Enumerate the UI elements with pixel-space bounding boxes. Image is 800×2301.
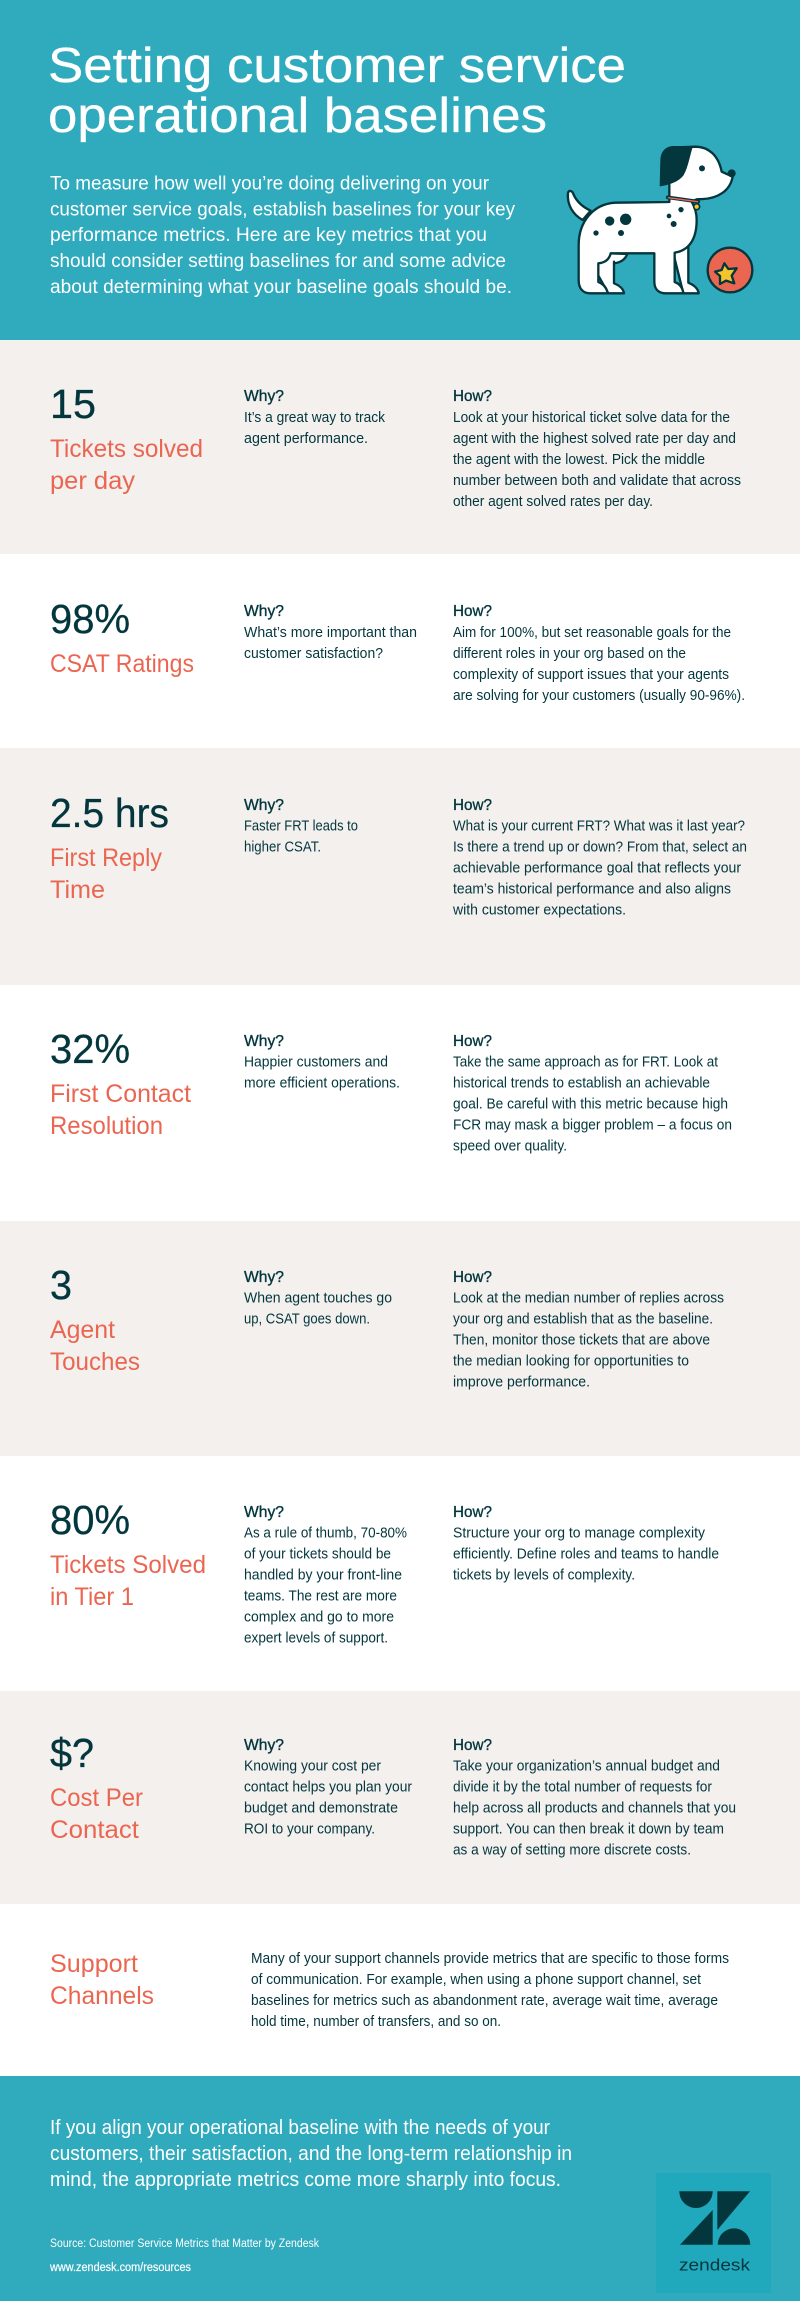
how column: What is your current FRT? What was it last year? bbox=[453, 818, 745, 834]
why column: Why? bbox=[244, 1504, 284, 1521]
metric label bbox=[50, 1080, 191, 1140]
intro text: performance metrics. Here are key metrics that you bbox=[50, 224, 487, 246]
how column: support. You can then break it down by team bbox=[453, 1822, 724, 1838]
why column: Why? bbox=[244, 603, 284, 620]
why column: Why? bbox=[244, 1737, 284, 1754]
closing statement: customers, their satisfaction, and the long-term relationship in bbox=[50, 2143, 572, 2165]
why column: Happier customers and bbox=[244, 1054, 388, 1070]
how column: How? bbox=[453, 1033, 492, 1050]
icon: dalmatian dog with ball bbox=[568, 146, 752, 293]
why column: customer satisfaction? bbox=[244, 646, 383, 662]
how column bbox=[452, 797, 747, 918]
why column bbox=[244, 1269, 392, 1328]
why column: handled by your front-line bbox=[244, 1568, 402, 1584]
why column bbox=[244, 388, 386, 447]
intro text: should consider setting baselines for and some advice bbox=[50, 250, 506, 272]
how column: different roles in your org based on the bbox=[453, 646, 686, 662]
how column: with customer expectations. bbox=[452, 902, 626, 918]
why column: Why? bbox=[244, 797, 284, 814]
panel: first reply time bbox=[0, 748, 800, 985]
how column bbox=[453, 1504, 719, 1584]
how column bbox=[453, 1737, 736, 1858]
header panel bbox=[0, 0, 800, 340]
why column: expert levels of support. bbox=[244, 1630, 388, 1646]
how column: How? bbox=[453, 1269, 492, 1286]
why column: budget and demonstrate bbox=[244, 1800, 398, 1816]
panel: first contact resolution bbox=[0, 985, 800, 1221]
footer panel bbox=[0, 2076, 800, 2301]
how column: efficiently. Define roles and teams to handle bbox=[453, 1546, 719, 1562]
how column: help across all products and channels that you bbox=[453, 1800, 736, 1816]
how column bbox=[453, 1269, 724, 1390]
metric label bbox=[50, 1551, 206, 1611]
website url: www.zendesk.com/resources bbox=[49, 2262, 191, 2274]
why column bbox=[244, 1737, 412, 1838]
why column: higher CSAT. bbox=[244, 840, 321, 856]
why column: Why? bbox=[244, 1269, 284, 1286]
why column bbox=[244, 1033, 400, 1092]
how column: team’s historical performance and also aligns bbox=[453, 882, 731, 898]
how column: How? bbox=[453, 797, 492, 814]
metric label bbox=[50, 844, 162, 904]
panel: cost per contact bbox=[0, 1691, 800, 1904]
why column bbox=[244, 603, 417, 662]
zendesk logo bbox=[656, 2173, 771, 2293]
metric value: 15 bbox=[50, 381, 96, 427]
how column: tickets by levels of complexity. bbox=[453, 1568, 635, 1584]
title: operational baselines bbox=[48, 89, 547, 143]
how column: Structure your org to manage complexity bbox=[453, 1526, 706, 1542]
why column: agent performance. bbox=[244, 431, 368, 447]
metric value: 32% bbox=[50, 1026, 130, 1072]
why column: Why? bbox=[244, 388, 284, 405]
how column: speed over quality. bbox=[453, 1138, 567, 1154]
metric value: 2.5 hrs bbox=[50, 790, 169, 836]
how column: Look at your historical ticket solve data for the bbox=[453, 410, 730, 426]
description: Many of your support channels provide metrics that are specific to those forms bbox=[251, 1951, 729, 1967]
how column: the agent with the lowest. Pick the middle bbox=[453, 452, 705, 468]
how column bbox=[453, 603, 745, 704]
closing statement bbox=[50, 2117, 572, 2191]
metric value: 80% bbox=[50, 1497, 130, 1543]
how column: FCR may mask a bigger problem – a focus on bbox=[453, 1118, 732, 1134]
how column: achievable performance goal that reflects your bbox=[453, 860, 741, 876]
how column: divide it by the total number of requests for bbox=[453, 1780, 712, 1796]
intro text: about determining what your baseline goals should be. bbox=[50, 276, 512, 298]
metric label: First Contact bbox=[50, 1080, 191, 1108]
how column: Then, monitor those tickets that are above bbox=[453, 1332, 710, 1348]
title bbox=[48, 39, 626, 143]
section label bbox=[50, 1950, 154, 2010]
how column: complexity of support issues that your agents bbox=[453, 667, 729, 683]
how column: historical trends to establish an achievable bbox=[453, 1076, 710, 1092]
source line: Source: Customer Service Metrics that Matter by Zendesk bbox=[50, 2238, 319, 2250]
metric label bbox=[50, 1784, 143, 1844]
metric label bbox=[50, 1316, 140, 1376]
metric label bbox=[50, 435, 203, 495]
metric label: Touches bbox=[50, 1348, 140, 1376]
metric label: Resolution bbox=[50, 1112, 163, 1140]
how column: goal. Be careful with this metric because high bbox=[453, 1096, 728, 1112]
why column: It’s a great way to track bbox=[244, 410, 386, 426]
metric label: CSAT Ratings bbox=[50, 650, 194, 678]
how column: Take your organization’s annual budget and bbox=[453, 1758, 720, 1774]
how column: agent with the highest solved rate per day and bbox=[453, 431, 736, 447]
metric value: $? bbox=[50, 1730, 94, 1776]
metric label: Tickets Solved bbox=[50, 1551, 206, 1579]
panel: CSAT ratings bbox=[0, 554, 800, 748]
intro text: customer service goals, establish baselines for your key bbox=[50, 198, 515, 220]
how column: Look at the median number of replies across bbox=[453, 1290, 724, 1306]
panel: tickets solved in tier 1 bbox=[0, 1456, 800, 1691]
why column: Knowing your cost per bbox=[244, 1758, 381, 1774]
panel: agent touches bbox=[0, 1221, 800, 1456]
how column bbox=[453, 388, 741, 510]
metric label: Contact bbox=[50, 1816, 139, 1844]
zendesk logo: zendesk bbox=[679, 2256, 751, 2274]
intro text: To measure how well you’re doing delivering on your bbox=[50, 172, 489, 194]
why column: As a rule of thumb, 70-80% bbox=[244, 1526, 407, 1542]
how column: number between both and validate that across bbox=[453, 473, 741, 489]
why column: When agent touches go bbox=[244, 1290, 392, 1306]
how column: Is there a trend up or down? From that, select an bbox=[453, 840, 747, 856]
why column: ROI to your company. bbox=[244, 1822, 375, 1838]
why column: Faster FRT leads to bbox=[244, 818, 358, 834]
description: of communication. For example, when using a phone support channel, set bbox=[251, 1972, 701, 1988]
how column: are solving for your customers (usually 90-96%). bbox=[453, 688, 745, 704]
how column: other agent solved rates per day. bbox=[453, 494, 653, 510]
why column: contact helps you plan your bbox=[244, 1780, 412, 1796]
section label: Support bbox=[50, 1950, 138, 1978]
metric label: in Tier 1 bbox=[50, 1583, 134, 1611]
how column: How? bbox=[453, 1504, 492, 1521]
how column: How? bbox=[453, 388, 492, 405]
why column: complex and go to more bbox=[244, 1610, 394, 1626]
metric label: Time bbox=[50, 876, 105, 904]
metric label: Tickets solved bbox=[50, 435, 203, 463]
how column: How? bbox=[453, 603, 492, 620]
metric label: Agent bbox=[50, 1316, 115, 1344]
how column: the median looking for opportunities to bbox=[453, 1354, 689, 1370]
closing statement: mind, the appropriate metrics come more sharply into focus. bbox=[50, 2169, 561, 2191]
metric label: First Reply bbox=[50, 844, 162, 872]
metric label: Cost Per bbox=[50, 1784, 143, 1812]
why column: of your tickets should be bbox=[244, 1546, 391, 1562]
how column: your org and establish that as the baseline. bbox=[453, 1312, 713, 1328]
description: baselines for metrics such as abandonment rate, average wait time, average bbox=[251, 1993, 718, 2009]
why column: teams. The rest are more bbox=[244, 1588, 397, 1604]
why column: Why? bbox=[244, 1033, 284, 1050]
how column: improve performance. bbox=[453, 1374, 590, 1390]
closing statement: If you align your operational baseline with the needs of your bbox=[50, 2117, 550, 2139]
why column: more efficient operations. bbox=[244, 1076, 400, 1092]
how column bbox=[453, 1033, 732, 1154]
title: Setting customer service bbox=[48, 39, 626, 93]
metric label: per day bbox=[50, 467, 136, 495]
why column bbox=[244, 1504, 407, 1646]
how column: Aim for 100%, but set reasonable goals for the bbox=[453, 625, 731, 641]
how column: How? bbox=[453, 1737, 492, 1754]
why column: up, CSAT goes down. bbox=[244, 1312, 370, 1328]
why column bbox=[244, 797, 358, 856]
description: hold time, number of transfers, and so on. bbox=[251, 2014, 501, 2030]
how column: as a way of setting more discrete costs. bbox=[453, 1842, 691, 1858]
description bbox=[251, 1951, 729, 2030]
panel: tickets solved per day bbox=[0, 340, 800, 554]
metric value: 98% bbox=[50, 596, 130, 642]
intro text bbox=[50, 172, 515, 298]
metric value: 3 bbox=[50, 1262, 72, 1308]
why column: What’s more important than bbox=[244, 625, 417, 641]
panel: support channels bbox=[0, 1904, 800, 2076]
section label: Channels bbox=[50, 1982, 154, 2010]
how column: Take the same approach as for FRT. Look at bbox=[453, 1054, 718, 1070]
